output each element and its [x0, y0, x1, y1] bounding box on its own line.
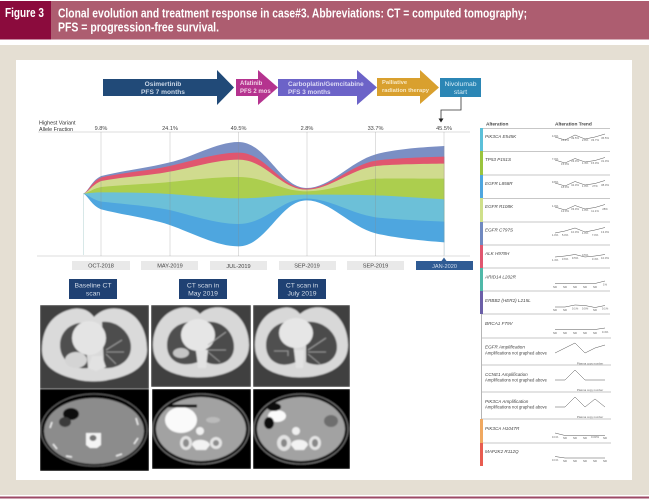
date labels: JUL-2019: [226, 264, 251, 270]
date labels: SEP-2019: [294, 264, 320, 270]
arrow: Afatinib: [236, 70, 278, 105]
trend sparklines: 3.6%: [562, 257, 569, 261]
trend sparklines: 3.4%: [592, 257, 599, 261]
trend sparklines: 33.0%: [571, 159, 579, 163]
trend sparklines: 9.5%: [572, 256, 579, 260]
allele fractions: 49.5%: [231, 126, 246, 132]
trend sparklines: Plasma copy number: [577, 388, 603, 392]
allele fractions: 33.7%: [368, 126, 383, 132]
chest CT: May 2019: [151, 305, 251, 387]
allele fractions: [95, 126, 452, 132]
trend sparklines: 0.5%: [582, 253, 589, 257]
fish plot: [37, 120, 473, 270]
alteration names: ARID14 L202R: [484, 274, 517, 280]
trend sparklines: 15.0%: [591, 161, 599, 165]
box: Nivolumab start: start: [454, 89, 467, 96]
trend sparklines: ND: [573, 459, 577, 463]
trend sparklines: 10.0%: [601, 256, 609, 260]
trend sparklines: ND: [593, 285, 597, 289]
trend sparklines: ND: [563, 285, 567, 289]
CT label: May 2019: [179, 279, 227, 299]
trend sparklines: ND: [563, 459, 567, 463]
trend sparklines: 0.1%: [572, 306, 579, 310]
alteration names: PIK3CA H1047R: [485, 426, 520, 431]
trend sparklines: 45.5%: [601, 136, 609, 140]
abdominal CT: July 2019: [253, 389, 350, 469]
allele fractions: 24.1%: [162, 126, 178, 132]
trend sparklines: 4.9%: [552, 134, 559, 138]
alteration names: PIK3CA E545K: [485, 134, 517, 139]
figure label: Figure 3: [5, 5, 44, 20]
trend sparklines: 7.0%: [552, 157, 559, 161]
arrow: Nivolumab to January 2020: [438, 97, 461, 122]
alteration names: EGFR Amplification: [485, 344, 525, 350]
alteration names: ALK H978H: [484, 251, 510, 256]
trend sparklines: 5.0%: [562, 233, 569, 237]
trend sparklines: 42.0%: [571, 183, 579, 187]
arrow: Carboplatin/Gemcitabine: Carboplatin/Gemcitabine: [288, 81, 364, 88]
arrow: Palliative radiation therapy: radiation therapy: [382, 88, 430, 94]
CT label: May 2019: May 2019: [188, 290, 218, 298]
alteration names: ERBB2 (HER2) L215L: [485, 298, 531, 303]
alteration table: Alteration Trend: [555, 122, 592, 128]
alteration colour key: [480, 128, 483, 466]
chest CT: July 2019: [253, 305, 350, 387]
trend sparklines: 12.0%: [561, 209, 569, 213]
arrow: Palliative radiation therapy: Palliative: [382, 80, 408, 86]
date labels: OCT-2018: [88, 264, 114, 270]
trend sparklines: 15.0%: [561, 162, 569, 166]
treatment timeline arrows: [103, 70, 481, 122]
trend sparklines: 0.1%: [552, 435, 559, 439]
header band: [0, 1, 649, 40]
arrow: Carboplatin/Gemcitabine: [278, 70, 377, 105]
trend sparklines: Plasma copy number: [577, 415, 603, 419]
date labels: MAY-2019: [157, 264, 183, 270]
trend sparklines: ND: [583, 331, 587, 335]
CT label: July 2019: July 2019: [287, 290, 317, 298]
trend sparklines: ND: [573, 436, 577, 440]
alteration names: PIK3CA Amplification: [485, 399, 529, 404]
alteration names: BRCA1 F79V: [485, 321, 514, 326]
allele fractions: 9.8%: [95, 126, 107, 132]
trend sparklines: 13.0%: [601, 230, 609, 234]
trend sparklines: 9.8%: [552, 180, 559, 184]
box: Nivolumab start: [440, 78, 481, 97]
white panel: [16, 60, 632, 480]
allele fractions: 45.5%: [436, 126, 452, 132]
trend sparklines: 38.0%: [601, 183, 609, 187]
CT label: May 2019: CT scan in: [187, 282, 219, 290]
trend sparklines: ND: [553, 331, 557, 335]
date labels: [72, 258, 473, 270]
trend sparklines: 2.8%: [582, 138, 589, 142]
alteration table: [480, 122, 611, 466]
trend sparklines: ND: [583, 285, 587, 289]
CT label: baseline: Baseline CT: [74, 282, 112, 290]
title: PFS = progression-free survival.: [58, 20, 219, 34]
trend sparklines: ND: [553, 308, 557, 312]
arrow: Osimertinib: PFS 7 months: [141, 89, 185, 96]
arrow: Palliative radiation therapy: [377, 70, 439, 104]
box: Nivolumab start: Nivolumab: [444, 81, 477, 88]
trend sparklines: ND: [603, 459, 607, 463]
trend sparklines: ND: [573, 285, 577, 289]
trend sparklines: ND: [573, 331, 577, 335]
trend sparklines: 31.0%: [601, 159, 609, 163]
CT label: July 2019: CT scan in: [286, 282, 318, 290]
date labels: JAN-2020: [432, 264, 457, 270]
table headers: Alteration: [486, 122, 508, 128]
trend sparklines: 33.0%: [571, 207, 579, 211]
abdominal CT: baseline: [40, 389, 149, 471]
arrow: Osimertinib: Osimertinib: [145, 81, 181, 88]
alteration names: EGFR R108K: [485, 204, 514, 209]
trend sparklines: ND: [563, 331, 567, 335]
trend sparklines: 1.4%: [582, 161, 589, 165]
trend sparklines: 0.1%: [552, 458, 559, 462]
abdominal CT: May 2019: [152, 389, 251, 469]
trend sparklines: [552, 134, 609, 463]
y label: Allele Fraction: [39, 127, 73, 133]
trend sparklines: ND: [583, 436, 587, 440]
trend sparklines: 1.0%: [552, 233, 559, 237]
streams: [83, 142, 444, 255]
trend sparklines: 0.4%: [602, 330, 609, 334]
trend sparklines: 1.0%: [582, 231, 589, 235]
alteration names: MAP2K2 R112Q: [485, 449, 519, 454]
trend sparklines: 0.1%: [602, 306, 609, 310]
trend sparklines: ND: [563, 436, 567, 440]
trend sparklines: 14.1%: [561, 138, 569, 142]
trend sparklines: ND: [553, 285, 557, 289]
trend sparklines: 7.0%: [592, 233, 599, 237]
arrow: Carboplatin/Gemcitabine: PFS 3 months: [288, 89, 331, 96]
trend sparklines: 49.5%: [571, 136, 579, 140]
alteration names: EGFR L858R: [485, 181, 513, 186]
trend sparklines: Plasma copy number: [577, 362, 603, 366]
trend sparklines: 11.1%: [591, 209, 599, 213]
trend sparklines: 1.0%: [582, 208, 589, 212]
trend sparklines: 1.0%: [552, 204, 559, 208]
CT label: July 2019: [278, 279, 326, 299]
trend sparklines: ND: [593, 331, 597, 335]
alteration names: Amplifications not graphed above: [485, 350, 548, 356]
trend sparklines: ND: [593, 459, 597, 463]
trend sparklines: 28%: [602, 207, 608, 211]
CT label: baseline: scan: [86, 290, 100, 298]
allele fractions: 2.8%: [301, 126, 313, 132]
trend sparklines: ND: [603, 436, 607, 440]
alteration names: Amplifications not graphed above: [485, 378, 548, 382]
CT label: baseline: [69, 279, 117, 299]
trend sparklines: 1.4%: [552, 258, 559, 262]
trend sparklines: 0.5%: [582, 306, 589, 310]
arrow: Osimertinib: [103, 70, 234, 105]
alteration names: [484, 134, 548, 454]
date labels: SEP-2019: [363, 264, 388, 270]
trend sparklines: 10.0%: [571, 230, 579, 234]
CT scan panel: [40, 279, 350, 471]
trend sparklines: 1.0%: [582, 184, 589, 188]
bottom rule: [0, 496, 649, 498]
alteration names: CCNE1 Amplification: [485, 372, 528, 377]
trend sparklines: 33.7%: [591, 138, 599, 142]
trend sparklines: 0.03%: [591, 435, 599, 439]
arrow: Afatinib: Afatinib: [240, 81, 263, 87]
trend sparklines: 1%: [603, 282, 608, 286]
trend sparklines: ND: [563, 308, 567, 312]
chest CT: baseline: [40, 305, 149, 389]
trend sparklines: ND: [593, 308, 597, 312]
title: Clonal evolution and treatment response in case#3. Abbreviations: CT = computed tomography;: [58, 6, 527, 20]
alteration names: TP53 P151S: [485, 157, 512, 162]
trend sparklines: 27%: [592, 184, 598, 188]
y label: Highest Variant: [39, 120, 76, 126]
alteration names: Amplifications not graphed above: [485, 404, 548, 410]
trend sparklines: 18.0%: [561, 185, 569, 189]
arrow: Afatinib: PFS 2 mos: [240, 89, 271, 95]
alteration names: EGFR C797S: [485, 228, 514, 232]
trend sparklines: ND: [583, 459, 587, 463]
